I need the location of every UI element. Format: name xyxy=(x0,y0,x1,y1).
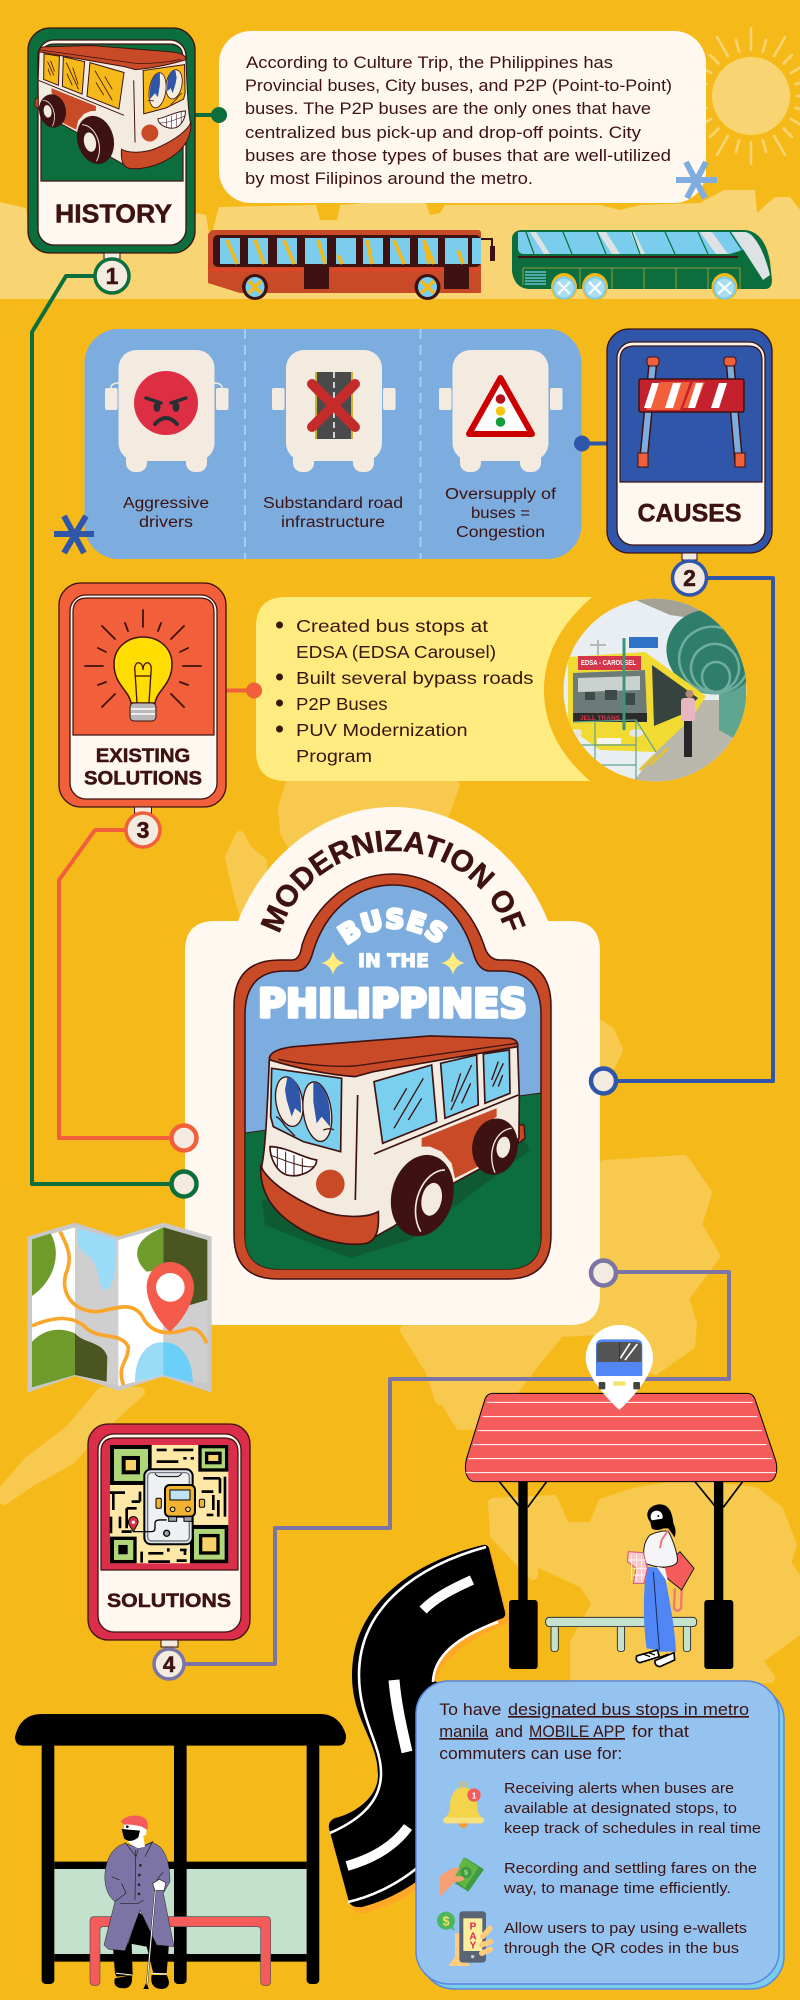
panel: causes card xyxy=(607,329,772,553)
text: fares xyxy=(503,1860,757,1897)
icon: red city bus xyxy=(208,230,495,300)
panel: history intro text: buses. The P2P buses are the only ones that have xyxy=(245,99,651,118)
panel: existing solutions list xyxy=(256,597,592,781)
connector dot: existing solutions xyxy=(226,682,262,698)
connector lines xyxy=(32,276,773,1664)
illustration: seated man with cane xyxy=(104,1815,174,1989)
cause: aggressive drivers: Aggressive xyxy=(123,495,209,512)
panel: causes list xyxy=(84,329,582,559)
panel: existing solutions card: SOLUTIONS xyxy=(84,768,202,790)
title: philippines: PHILIPPINES xyxy=(258,982,527,1027)
photo: EDSA Carousel bus: EDSA - CAROUSEL xyxy=(581,660,637,667)
panel: history intro text: According to Culture Trip, the Philippines has xyxy=(246,53,613,72)
text: alerts: Receiving alerts when buses are xyxy=(504,1780,734,1797)
intro text: MOBILE APP xyxy=(529,1723,625,1741)
panel: history intro text: Provincial buses, City buses, and P2P (Point-to-Point) xyxy=(245,76,672,95)
intro text: for that xyxy=(632,1723,689,1741)
icon: phone payment: Y xyxy=(470,1941,477,1952)
illustration: woman waiting xyxy=(627,1504,694,1667)
number badge 3: 3 xyxy=(137,817,149,843)
panel: existing solutions list: Created bus stops at xyxy=(296,616,488,636)
cause: substandard road infrastructure: infrastructure xyxy=(281,514,385,531)
icon: notification bell xyxy=(443,1782,484,1828)
badge: buses in the philippines: BUSES xyxy=(336,907,448,946)
number badge 1 xyxy=(95,253,129,293)
title: modernization of xyxy=(274,851,512,970)
cause: substandard road infrastructure: Substandard road xyxy=(263,495,403,512)
icon: smiling bus xyxy=(35,46,191,169)
icon: phone payment xyxy=(437,1911,491,1966)
icon: hand with cash: $ xyxy=(464,1870,468,1877)
icon: QR code with phone and bus xyxy=(110,1445,228,1563)
illustration: smiling bus xyxy=(261,1036,525,1244)
icon: folded map xyxy=(27,1223,212,1393)
number badge 4: 4 xyxy=(163,1652,176,1677)
photo: EDSA Carousel bus xyxy=(564,598,746,782)
panel: solutions card xyxy=(88,1424,250,1640)
icon: road barrier xyxy=(638,357,745,467)
text: fares: Recording and settling fares on the xyxy=(504,1860,757,1877)
icon: phone payment: A xyxy=(469,1931,477,1942)
intro text: commuters can use for: xyxy=(439,1745,622,1763)
intro text: and xyxy=(495,1723,523,1741)
panel: history intro text: centralized bus pick-up and drop-off points. City xyxy=(245,123,642,142)
panel: existing solutions list: Built several bypass roads xyxy=(296,668,534,688)
badge: buses in the philippines xyxy=(233,873,552,1280)
city skyline xyxy=(0,190,800,299)
panel: solutions information card xyxy=(416,1681,784,1989)
title: in the: IN THE xyxy=(358,950,429,972)
panel: history intro text xyxy=(219,31,706,203)
icon: notification bell: 1 xyxy=(472,1790,477,1800)
heading: causes: CAUSES xyxy=(638,500,742,528)
panel: title card: MODERNIZATION OF xyxy=(260,830,526,933)
number badge 1: 1 xyxy=(106,263,119,289)
panel: history card xyxy=(28,28,195,253)
icon: bus stop pin xyxy=(586,1325,653,1410)
heading: solutions: SOLUTIONS xyxy=(107,1591,231,1612)
text: e-wallets xyxy=(504,1920,747,1957)
number badge 2 xyxy=(672,553,706,595)
cause: oversupply of buses: buses = xyxy=(471,505,530,522)
icon: dark blue asterisk xyxy=(54,516,94,553)
text: alerts xyxy=(504,1780,761,1837)
text: alerts: available at designated stops, to xyxy=(504,1800,737,1817)
intro text xyxy=(439,1701,749,1763)
number badge 2: 2 xyxy=(683,565,696,591)
panel: existing solutions list: P2P Buses xyxy=(296,694,388,714)
number badge 4 xyxy=(154,1640,184,1679)
connector dot: causes xyxy=(574,436,608,452)
cause: aggressive drivers: drivers xyxy=(139,514,193,531)
panel: existing solutions card xyxy=(59,583,226,807)
cause: oversupply of buses: Congestion xyxy=(456,524,545,541)
intro text: To have xyxy=(439,1701,501,1719)
title: buses xyxy=(323,928,463,998)
sun xyxy=(683,28,800,164)
icon: light blue asterisk xyxy=(676,162,717,198)
panel: existing solutions list: EDSA (EDSA Carousel) xyxy=(296,642,496,662)
connector end: orange xyxy=(172,1126,196,1150)
text: e-wallets: through the QR codes in the bus xyxy=(504,1940,739,1957)
connector dot: history xyxy=(195,107,227,123)
connector end: purple xyxy=(591,1260,616,1286)
intro text: manila xyxy=(439,1723,489,1741)
heading: history: HISTORY xyxy=(55,198,172,228)
illustration: bottom bus shelter xyxy=(15,1714,346,1986)
sparkles xyxy=(321,951,465,975)
number badge 3 xyxy=(126,807,160,847)
background map pattern xyxy=(4,785,796,1678)
text: e-wallets: Allow users to pay using e-wallets xyxy=(504,1920,747,1937)
intro text: designated bus stops in metro xyxy=(508,1701,749,1719)
text: alerts: keep track of schedules in real time xyxy=(504,1820,761,1837)
illustration: road xyxy=(329,1545,508,1913)
icon: phone payment: $ xyxy=(442,1914,450,1928)
connector end: blue xyxy=(591,1068,616,1094)
cause: oversupply of buses: Oversupply of xyxy=(445,486,557,503)
panel: history intro text: by most Filipinos around the metro. xyxy=(245,169,533,188)
panel: existing solutions list: Program xyxy=(296,746,372,766)
illustration: top bus shelter xyxy=(465,1393,777,1669)
text: fares: way, to manage time efficiently. xyxy=(503,1880,731,1897)
icon: light bulb xyxy=(85,610,201,721)
heading: existing solutions: EXISTING xyxy=(96,745,190,767)
cause: oversupply of buses xyxy=(439,350,562,541)
connector end: green xyxy=(172,1172,196,1196)
photo: EDSA Carousel bus: JELL TRANS xyxy=(580,715,621,722)
cause: substandard road infrastructure xyxy=(263,350,403,531)
icon: phone payment: P xyxy=(470,1921,477,1932)
panel: existing solutions list: PUV Modernization xyxy=(296,720,468,740)
icon: hand with cash xyxy=(440,1857,484,1897)
panel: history intro text: buses are those types of buses that are well-utilized xyxy=(245,146,671,165)
cause: aggressive drivers xyxy=(105,350,228,531)
panel: title card xyxy=(185,807,600,1325)
icon: green provincial bus xyxy=(512,230,772,301)
